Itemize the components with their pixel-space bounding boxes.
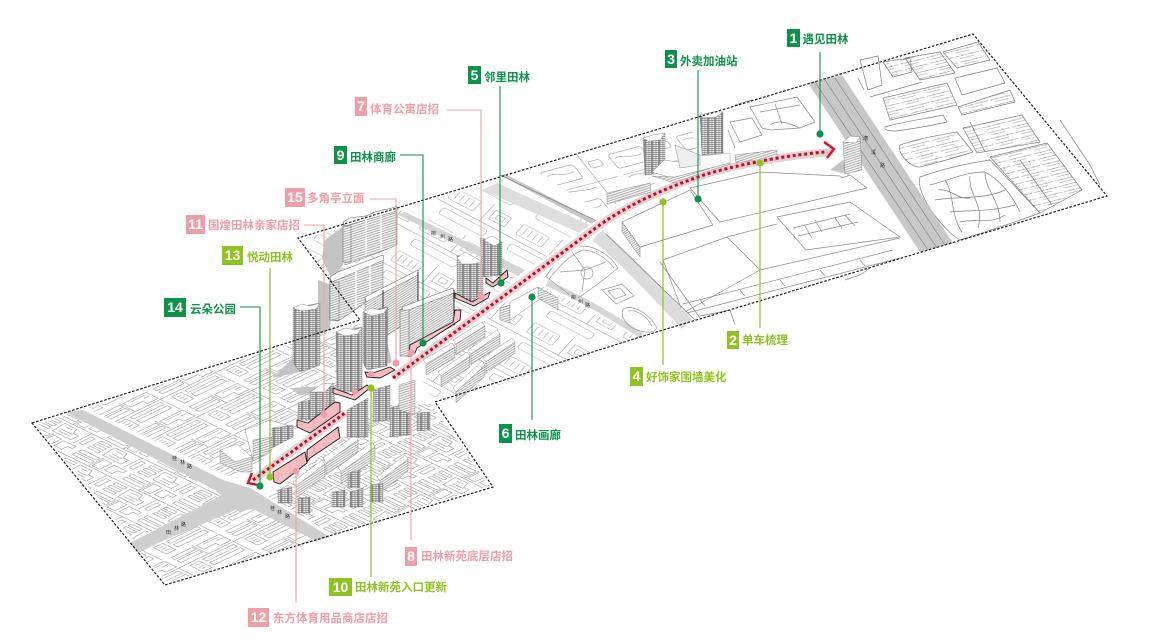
label 1 遇见田林 bbox=[787, 29, 849, 138]
label 4 好饰家围墙美化 bbox=[630, 198, 727, 386]
label 14 云朵公园: 云朵公园 bbox=[190, 303, 236, 316]
label 11 国煌田林亲家店招: 11 bbox=[188, 216, 203, 232]
buildings near crossing bbox=[220, 420, 293, 472]
label 6 田林画廊: 6 bbox=[502, 425, 510, 441]
label 2 单车梳理 bbox=[727, 159, 788, 349]
label 3 外卖加油站 bbox=[665, 50, 738, 203]
label 3 外卖加油站: 外卖加油站 bbox=[680, 54, 738, 68]
label 8 田林新苑底层店招 bbox=[405, 349, 513, 566]
label 11 国煌田林亲家店招 bbox=[186, 215, 328, 418]
street name: Caoxi road: 漕溪路 bbox=[863, 135, 885, 169]
road: Caoxi road bbox=[808, 75, 953, 252]
label 10 田林新苑入口更新 bbox=[329, 384, 447, 596]
street name: middle road: 柳州路 bbox=[431, 230, 453, 243]
street name: lower left road: 田林路 bbox=[166, 521, 186, 536]
towers bbox=[293, 112, 862, 393]
shopfront: Guohuang bbox=[297, 402, 340, 433]
road detail lines bbox=[500, 78, 945, 320]
map: roads bbox=[65, 75, 953, 552]
building shadows bbox=[272, 160, 850, 395]
label 9 田林商廊: 田林商廊 bbox=[350, 150, 396, 164]
label 10 田林新苑入口更新: 田林新苑入口更新 bbox=[355, 580, 447, 594]
slab rows: lower bbox=[278, 380, 430, 513]
label 7 体育公寓店招 bbox=[355, 97, 485, 300]
park paths bbox=[545, 246, 657, 332]
label 2 单车梳理: 2 bbox=[729, 332, 737, 348]
label 12 东方体育用品商店店招: 12 bbox=[251, 609, 266, 625]
label 8 田林新苑底层店招: 田林新苑底层店招 bbox=[421, 549, 513, 563]
label 13 悦动田林: 13 bbox=[225, 247, 240, 263]
label 9 田林商廊 bbox=[334, 146, 427, 347]
route: red dotted line bbox=[253, 152, 833, 480]
label 15 多角亭立面: 15 bbox=[287, 189, 303, 205]
road: narrow upper band bbox=[500, 174, 597, 224]
arrow: route start bbox=[248, 473, 258, 485]
label 11 国煌田林亲家店招: 国煌田林亲家店招 bbox=[208, 218, 300, 232]
label 1 遇见田林: 遇见田林 bbox=[802, 32, 849, 46]
buildings beside pink shopfront 11 bbox=[298, 383, 335, 420]
road: left diagonal bbox=[65, 410, 330, 541]
site boundary bbox=[32, 34, 1107, 585]
large flat building bbox=[622, 190, 713, 257]
shopfront: Dongfang sports B bbox=[307, 427, 340, 462]
shopfront: Tianlin arcade bbox=[409, 310, 461, 353]
label 9 田林商廊: 9 bbox=[337, 147, 345, 163]
label 13 悦动田林 bbox=[222, 246, 293, 481]
shopfront: neighbourhood podium A bbox=[455, 292, 490, 306]
label 2 单车梳理: 单车梳理 bbox=[742, 333, 788, 347]
shopfront: Dongfang sports A bbox=[273, 452, 307, 484]
street name: left road south: 桂林路 bbox=[270, 505, 290, 520]
label 15 多角亭立面 bbox=[285, 188, 400, 367]
pink marker dots bbox=[352, 371, 374, 395]
low striped blocks along route bbox=[607, 145, 777, 204]
route corridor bbox=[253, 152, 833, 480]
label 12 东方体育用品商店店招 bbox=[248, 467, 388, 627]
slab rows: central bbox=[423, 287, 558, 403]
shopfront: entrance podium bbox=[333, 385, 370, 400]
shopfront: neighbourhood podium B bbox=[486, 270, 508, 287]
label 5 邻里田林 bbox=[468, 66, 530, 287]
label 6 田林画廊 bbox=[499, 293, 561, 443]
label 7 体育公寓店招: 7 bbox=[357, 98, 365, 114]
label 4 好饰家围墙美化: 4 bbox=[633, 368, 641, 384]
site boundary dashed outline bbox=[32, 34, 1107, 585]
slab buildings: northwest group bbox=[330, 206, 455, 357]
label 4 好饰家围墙美化: 好饰家围墙美化 bbox=[646, 370, 727, 384]
label 15 多角亭立面: 多角亭立面 bbox=[307, 191, 364, 205]
label 5 邻里田林: 邻里田林 bbox=[484, 70, 530, 84]
label 6 田林画廊: 田林画廊 bbox=[515, 428, 561, 442]
label 8 田林新苑底层店招: 8 bbox=[407, 548, 415, 564]
label 13 悦动田林: 悦动田林 bbox=[247, 250, 293, 264]
road: upper river band bbox=[482, 183, 592, 234]
label 14 云朵公园 bbox=[164, 298, 264, 490]
arrow: route end bbox=[824, 142, 834, 158]
label 10 田林新苑入口更新: 10 bbox=[333, 579, 348, 595]
road: lower park band bbox=[547, 283, 642, 336]
map: east blocks beyond Caoxi road bbox=[858, 42, 1100, 240]
label 1 遇见田林: 1 bbox=[790, 30, 798, 46]
label 3 外卖加油站: 3 bbox=[667, 51, 675, 67]
road: lower-left branch bbox=[130, 495, 240, 552]
label 12 东方体育用品商店店招: 东方体育用品商店店招 bbox=[273, 611, 388, 625]
pink shopfronts bbox=[273, 270, 508, 484]
map: street block texture bbox=[36, 122, 700, 582]
road: middle band bbox=[397, 212, 525, 276]
map: blocks east of tower row bbox=[660, 97, 900, 325]
label 14 云朵公园: 14 bbox=[167, 299, 183, 315]
street name: park road: 柳州路 bbox=[571, 294, 590, 309]
road: curving band bbox=[597, 235, 687, 324]
road: junction bbox=[222, 484, 268, 512]
label 5 邻里田林: 5 bbox=[471, 67, 479, 83]
street name: left road: 桂林路 bbox=[172, 455, 192, 470]
shopfront: polygon pavilion bbox=[365, 367, 395, 378]
label 7 体育公寓店招: 体育公寓店招 bbox=[370, 102, 439, 116]
